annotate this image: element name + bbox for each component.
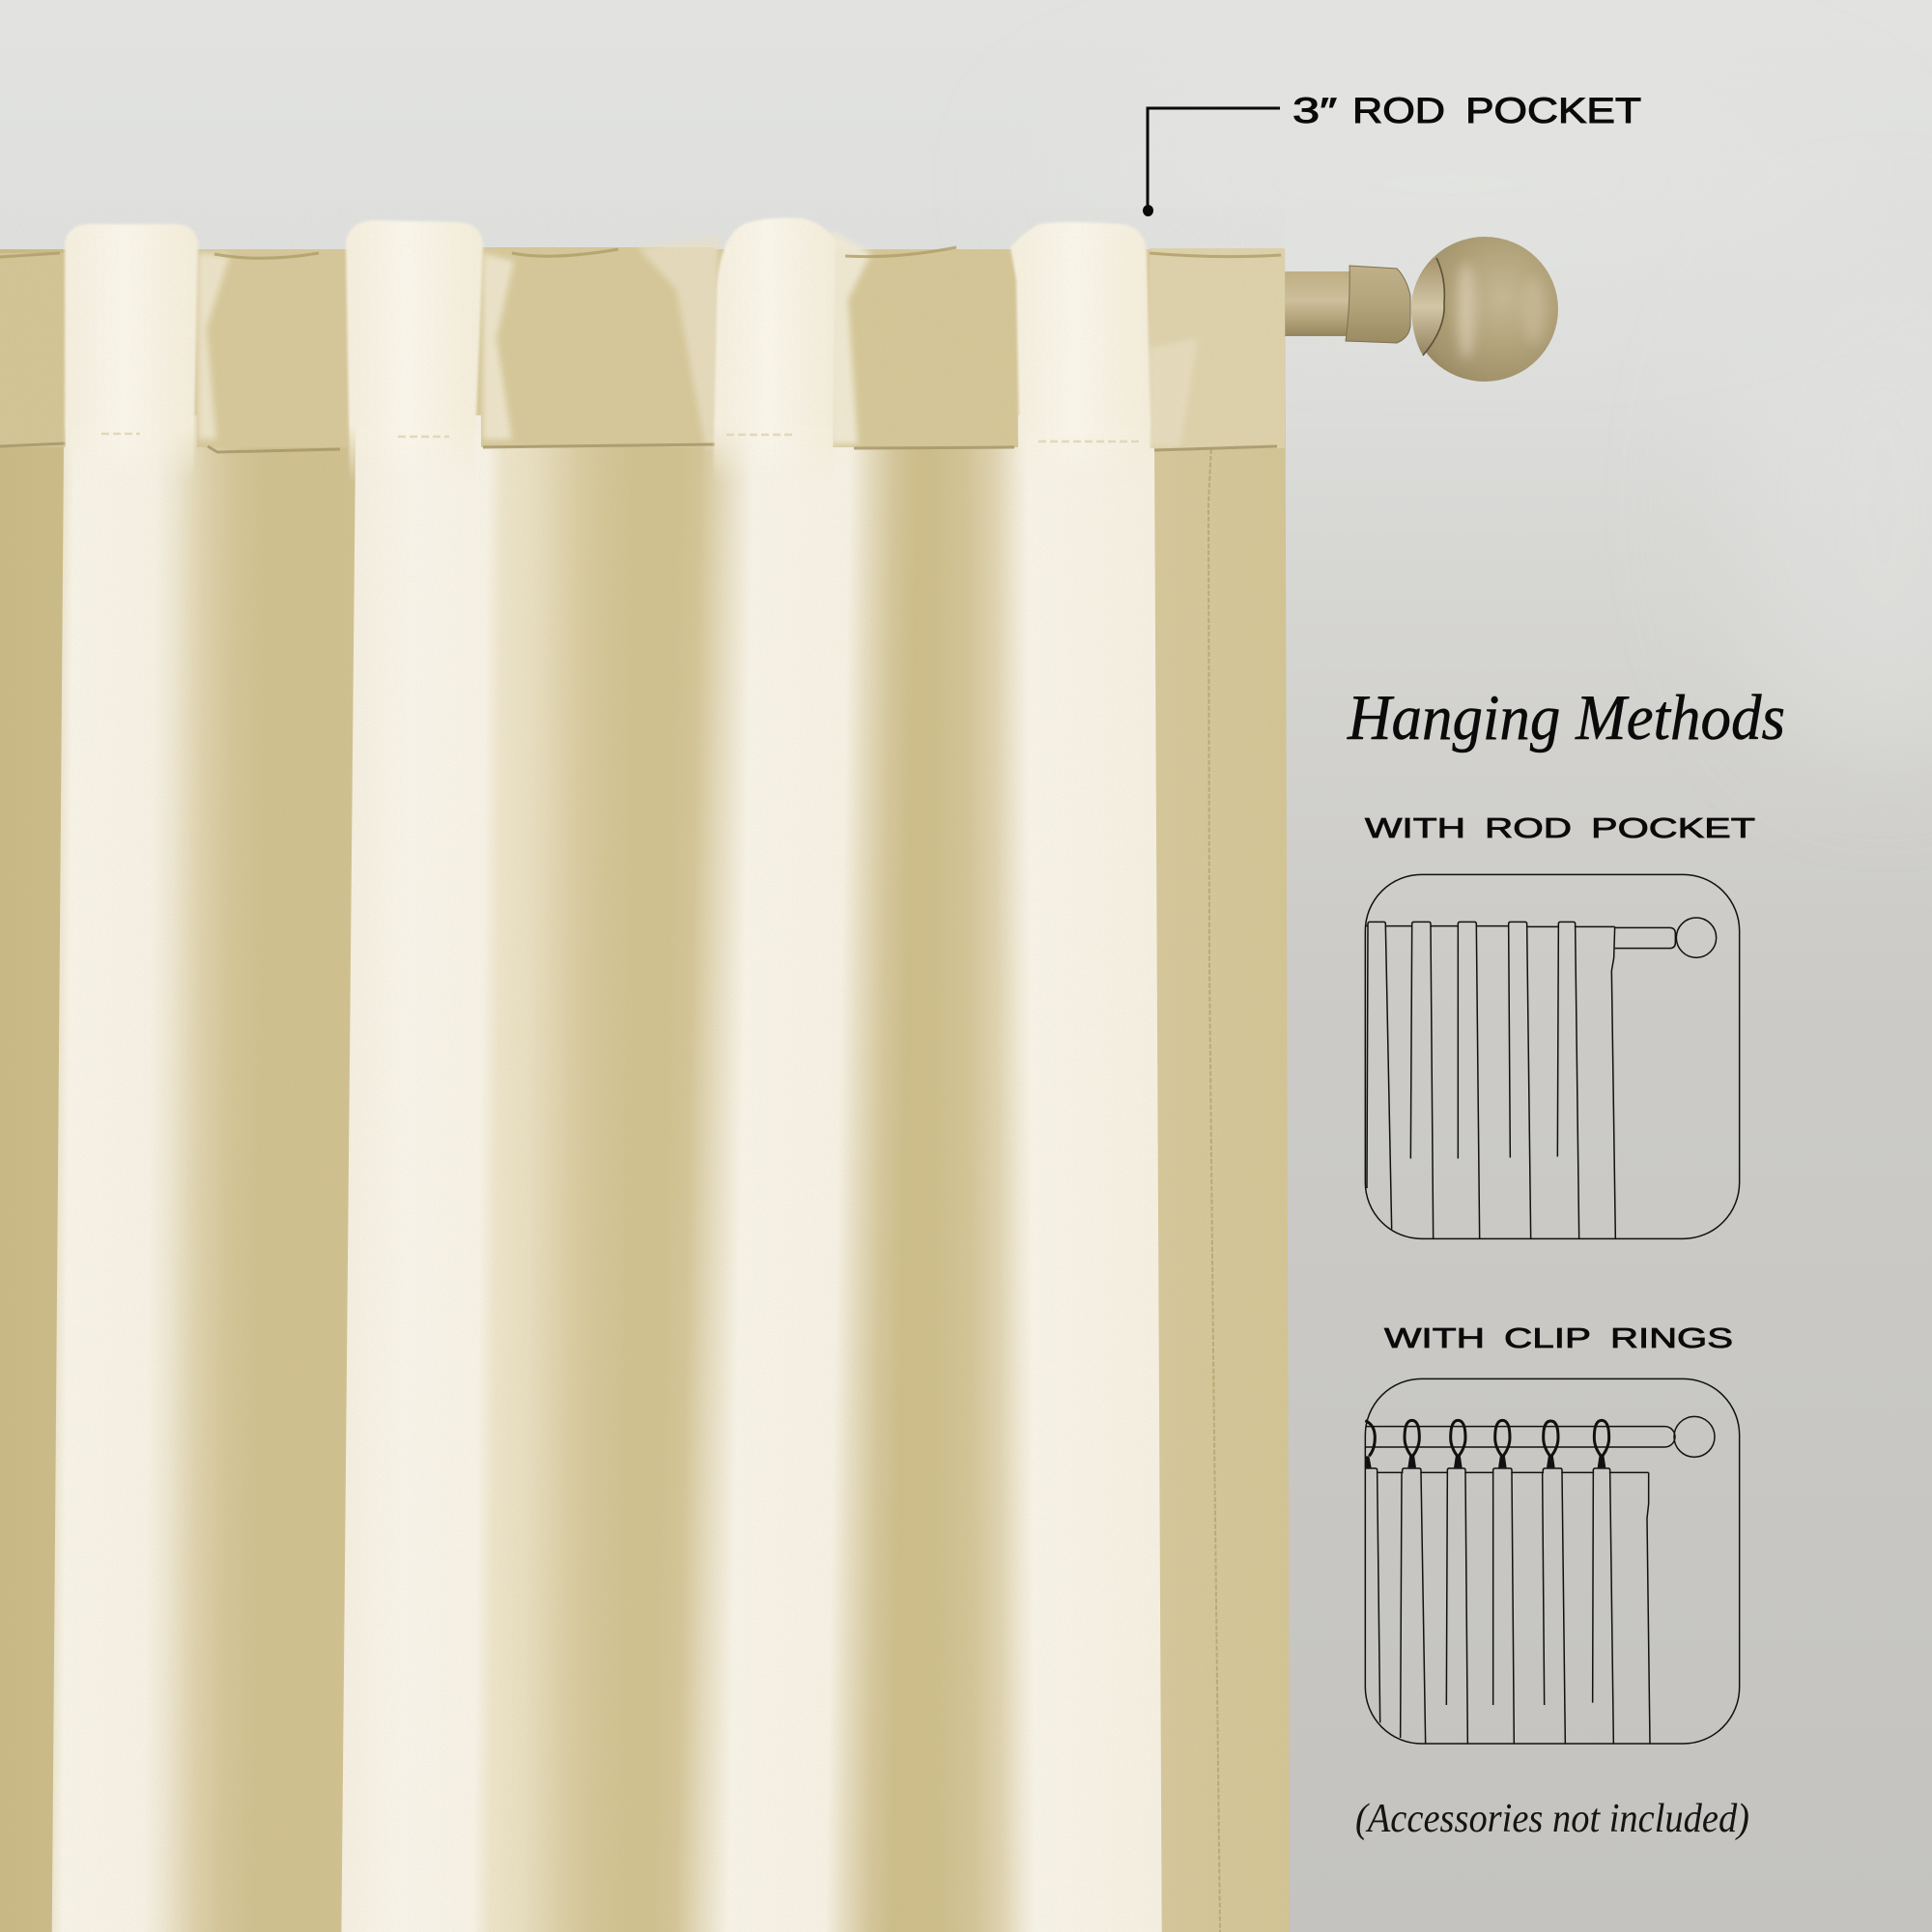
diagram: clip rings hanging xyxy=(1365,1378,1740,1744)
callout: 3 inch rod pocket: 3″ xyxy=(1293,91,1337,130)
curtain panel xyxy=(0,217,1294,1932)
stitch line across pleats xyxy=(101,434,1140,441)
top seams xyxy=(0,247,1281,258)
label: with clip rings: CLIP xyxy=(1504,1323,1591,1354)
curtain body base xyxy=(0,249,1294,1932)
fold ridge 3 xyxy=(674,429,906,1932)
clip bases xyxy=(1365,1455,1605,1467)
bottom seams xyxy=(0,443,1277,452)
fold ridge 2 xyxy=(341,415,600,1932)
fabric grain xyxy=(0,217,1294,1932)
label: with clip rings: RINGS xyxy=(1610,1323,1733,1354)
side hem stitch xyxy=(1208,253,1220,1932)
label: with rod pocket: WITH xyxy=(1365,813,1465,844)
label: with rod pocket xyxy=(1365,813,1755,844)
pleat tops xyxy=(65,218,1152,493)
note: accessories not included: (Accessories not included) xyxy=(1355,1797,1749,1841)
callout: 3 inch rod pocket: POCKET xyxy=(1465,91,1641,130)
diagram: rod pocket hanging xyxy=(1365,874,1740,1238)
label: with clip rings xyxy=(1384,1323,1733,1354)
fold ridge 1 xyxy=(52,415,239,1932)
rod pocket band xyxy=(0,230,1285,452)
label: with clip rings: WITH xyxy=(1384,1323,1485,1354)
label: with rod pocket: POCKET xyxy=(1591,813,1755,844)
fold ridge 4 xyxy=(964,415,1162,1932)
label: with rod pocket: ROD xyxy=(1485,813,1572,844)
curtain rod with finial xyxy=(1280,237,1558,382)
callout: 3 inch rod pocket xyxy=(1143,91,1641,216)
clip rings xyxy=(1365,1420,1609,1456)
heading: Hanging Methods: Hanging Methods xyxy=(1347,682,1785,753)
callout: 3 inch rod pocket: ROD xyxy=(1352,91,1445,130)
